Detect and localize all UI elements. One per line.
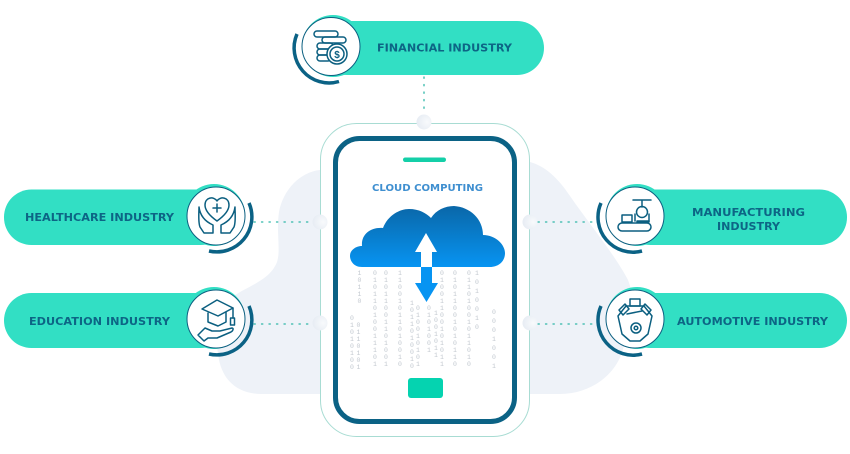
binary data rain: 0110101 [355,322,362,371]
pill: manufacturing industry: MANUFACTURING [692,207,805,219]
icon: coins [314,31,347,64]
pill: financial industry: FINANCIAL INDUSTRY [377,42,512,54]
binary data rain: 11001011010010 [396,270,404,368]
pill: healthcare industry [4,184,252,252]
pill: education industry: EDUCATION INDUSTRY [29,316,170,328]
binary data rain: 1010010 [474,270,480,333]
binary data rain [348,270,498,372]
binary data rain: 10110 [356,270,363,305]
binary data rain: 1011010010 [408,300,416,370]
icon: engine [618,299,652,341]
binary data rain: 01011001101001 [382,270,390,368]
binary data rain: 0101001 [426,305,432,354]
binary data rain: 010010101 [414,305,422,368]
pill: manufacturing industry [598,184,847,252]
pill: financial industry: $ [334,50,340,61]
binary data rain: 0001001 [490,309,498,372]
binary data rain: 01001100101011 [438,270,446,368]
binary data rain: 01101001011010 [466,270,472,368]
pill: automotive industry [598,287,847,355]
phone screen [336,138,514,422]
background blob [217,162,632,394]
connector nodes [312,114,538,330]
binary data rain: 01011010011101 [372,270,378,368]
screen title: CLOUD COMPUTING [372,183,483,194]
pill: automotive industry: AUTOMOTIVE INDUSTRY [677,316,828,328]
cloud with up/down arrow [350,206,505,302]
pill: education industry [4,287,252,355]
binary data rain: 01011001010110 [452,270,458,368]
phone outer outline [320,124,530,436]
icon: conveyor robot [618,200,651,231]
binary data rain: 1001011 [432,310,440,359]
pill: financial industry [294,15,544,83]
icon: graduation cap on hand [198,300,234,341]
phone button [408,378,443,398]
connector: dotted lines [254,62,596,324]
pill: healthcare industry: HEALTHCARE INDUSTRY [25,212,174,224]
pill: manufacturing industry: INDUSTRY [717,221,780,233]
binary data rain: 01010100 [348,315,356,371]
icon: heart in hands [199,198,235,233]
phone speaker [403,158,446,162]
